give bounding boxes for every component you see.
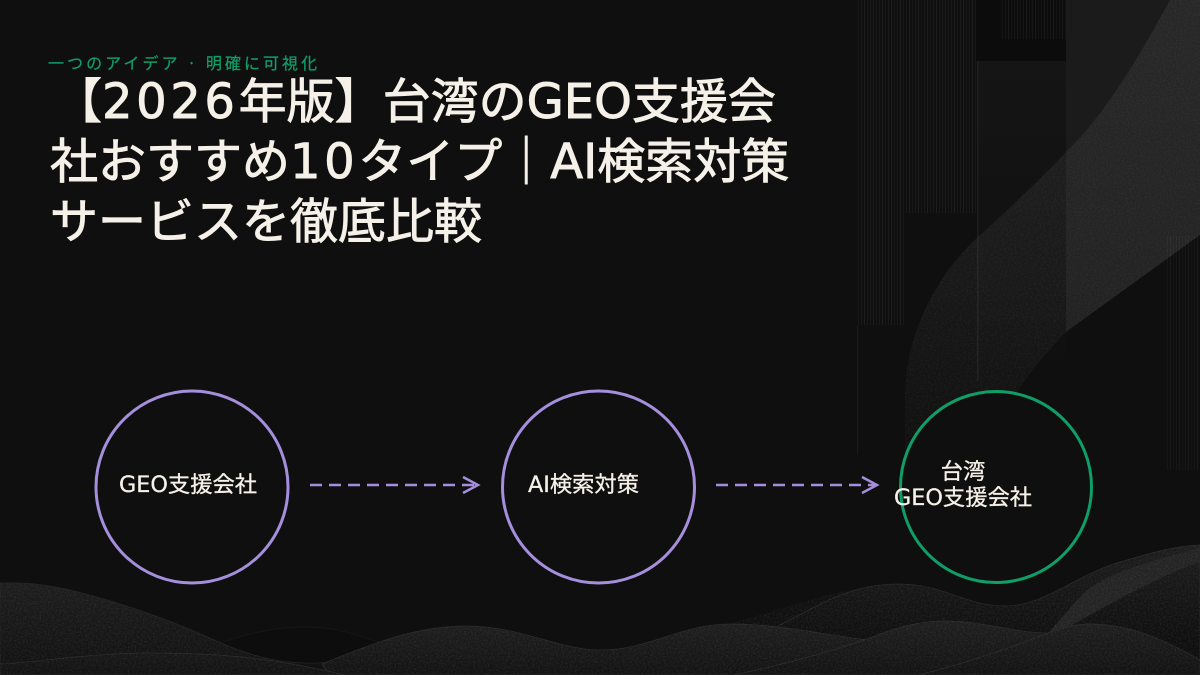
circle: AI検索対策 (502, 391, 694, 583)
label: 台湾 GEO支援会社 (894, 459, 1032, 511)
eyebrow: 一つのアイデア · 明確に可視化 (48, 50, 320, 74)
wave grain (0, 545, 1200, 675)
label: 台湾 GEO支援会社: 台湾 (941, 459, 985, 485)
arrow: second (716, 477, 877, 493)
circle: 台湾GEO支援会社 (900, 392, 1092, 582)
bottom waves (0, 545, 1200, 675)
title: 【2026年版】台湾のGEO支援会 (54, 74, 776, 130)
label: 台湾 GEO支援会社: GEO支援会社 (894, 485, 1032, 511)
title (50, 74, 789, 250)
arrow: first (310, 477, 478, 493)
top right architecture (857, 0, 1200, 470)
title: 社おすすめ10タイプ｜AI検索対策 (50, 134, 789, 190)
label: GEO支援会社: GEO支援会社 (119, 472, 257, 498)
circle: GEO支援会社 (96, 391, 288, 583)
label: AI検索対策: AI検索対策 (528, 472, 639, 498)
title: サービスを徹底比較 (50, 194, 482, 250)
